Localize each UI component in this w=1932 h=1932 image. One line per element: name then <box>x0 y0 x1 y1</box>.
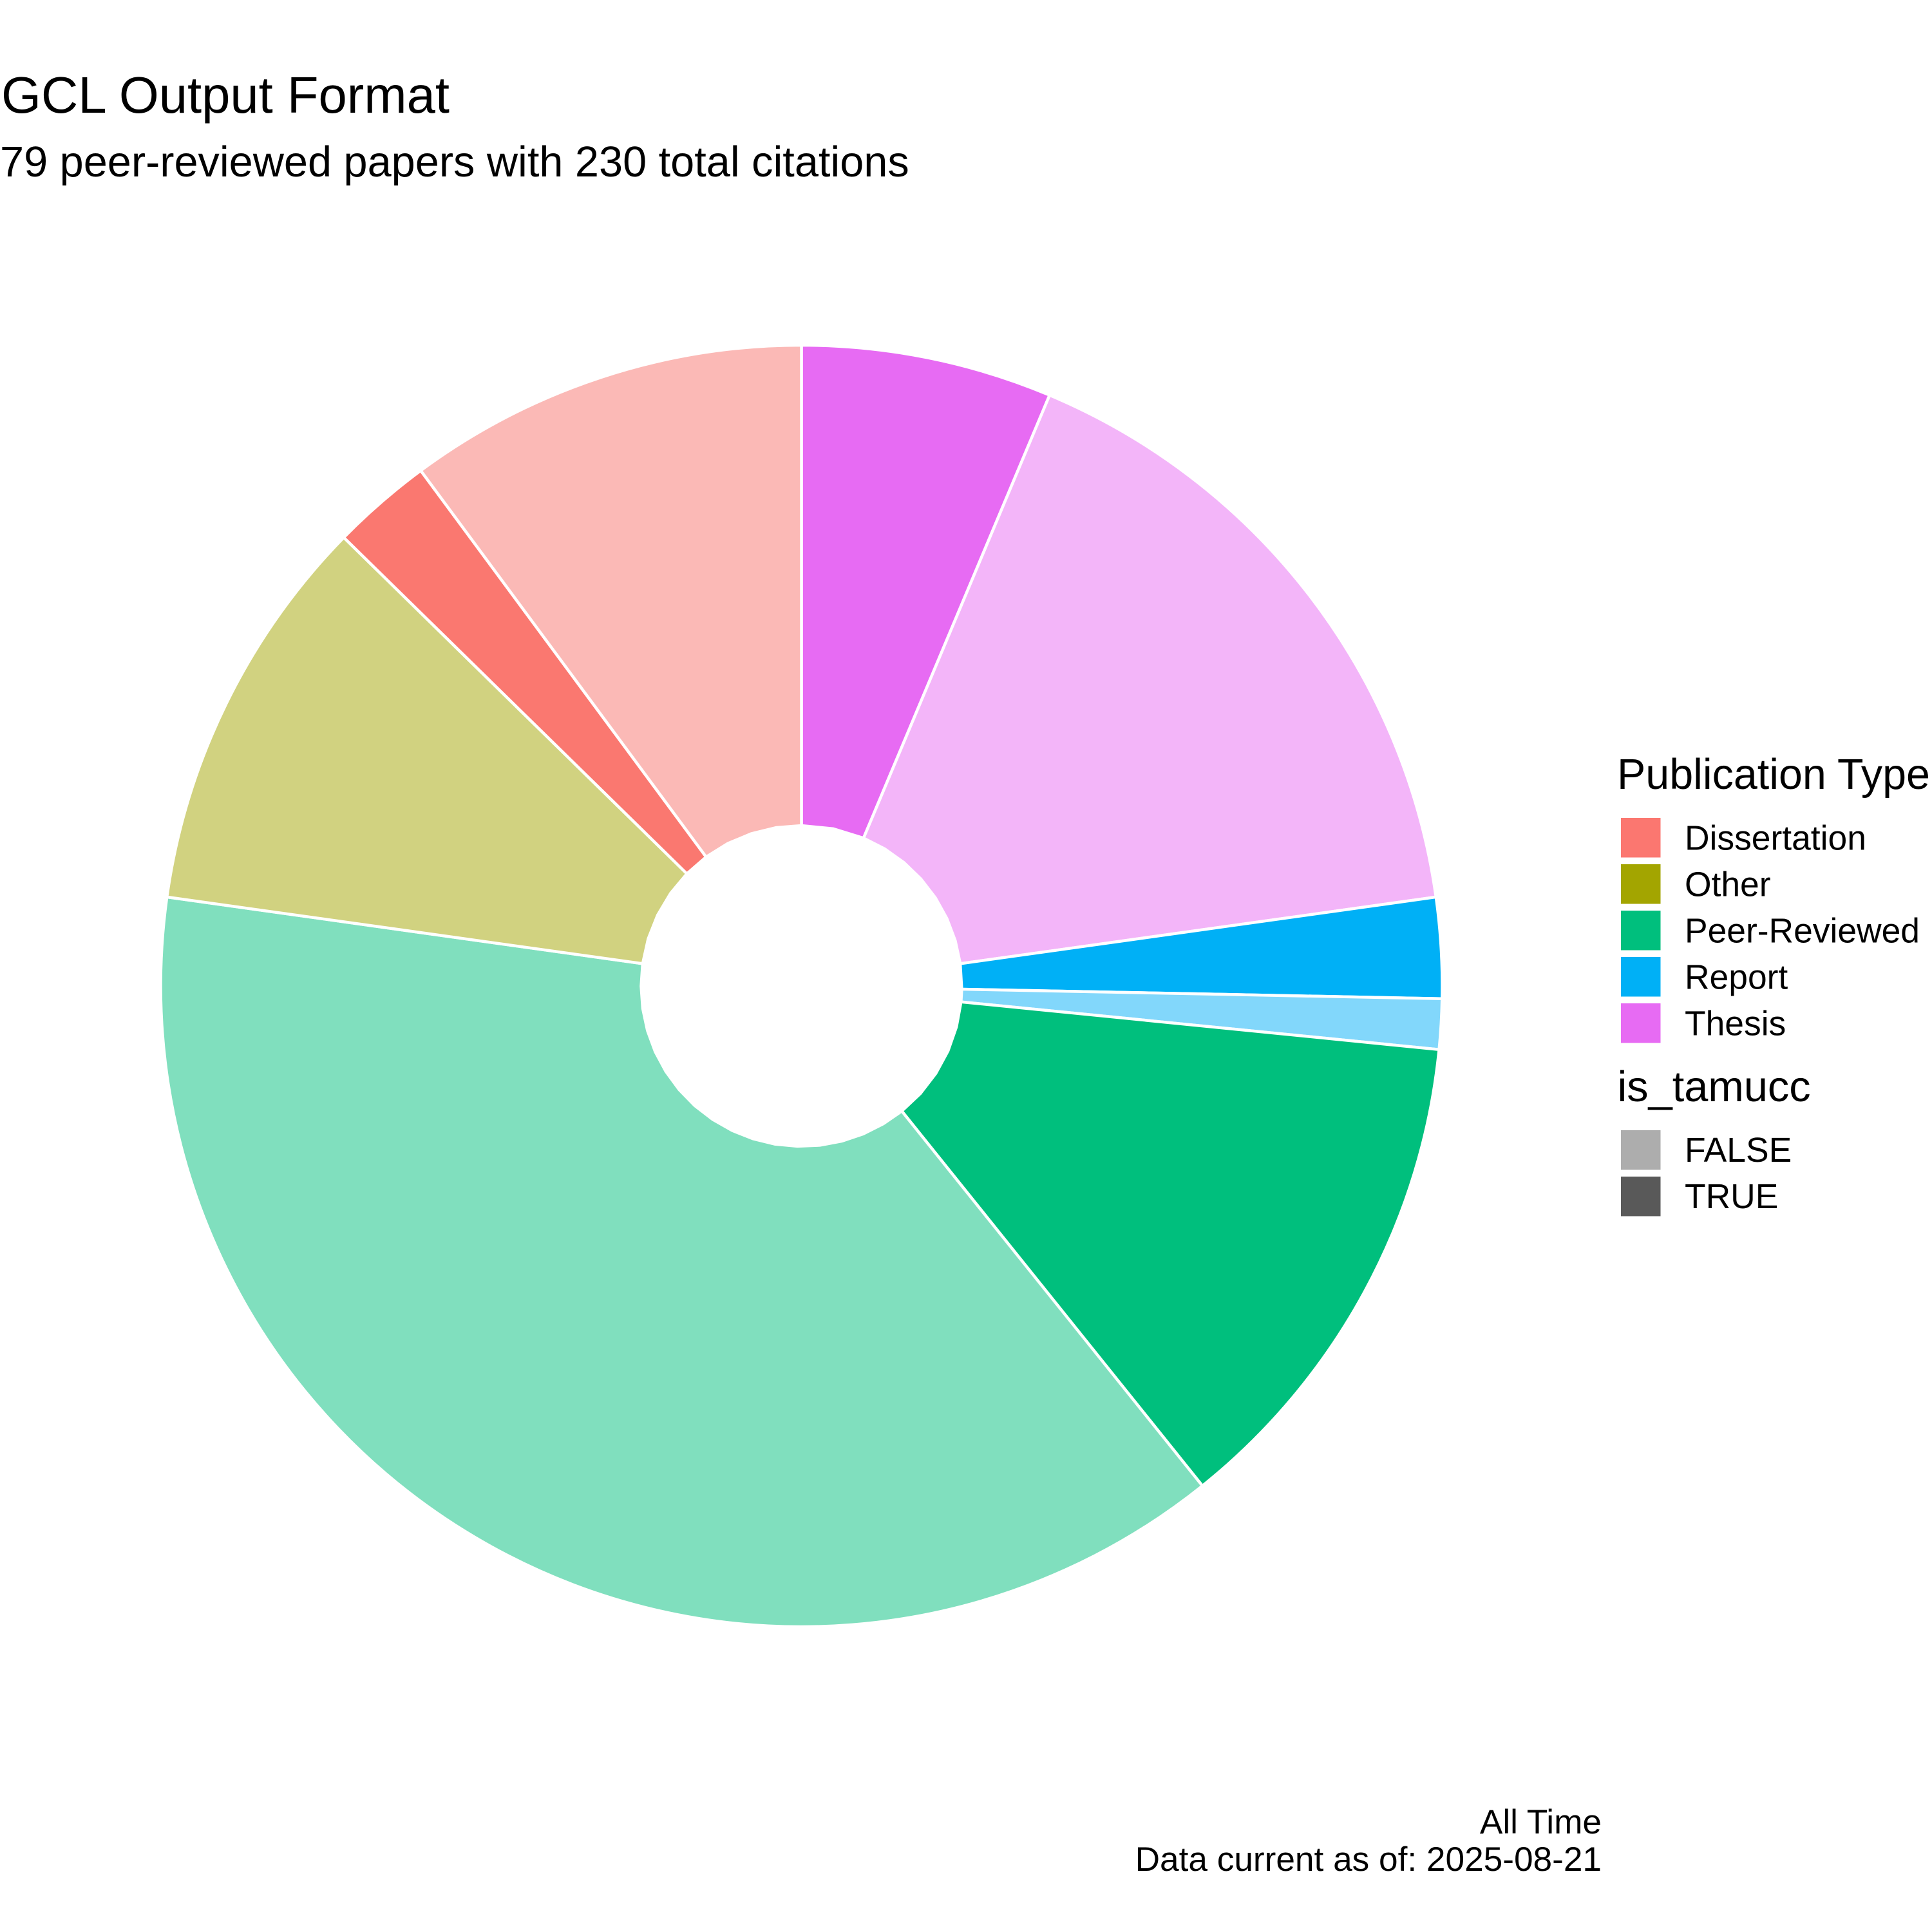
caption: Data current as of: 2025-08-21 <box>1135 1841 1602 1879</box>
slice: Peer-Reviewed FALSE <box>161 897 1202 1627</box>
legend item: Dissertation: Dissertation <box>1685 819 1866 858</box>
legend item: FALSE: FALSE <box>1685 1132 1792 1170</box>
legend title: Publication Type <box>1617 751 1930 799</box>
title: GCL Output Format <box>1 66 450 124</box>
slice: Peer-Reviewed TRUE <box>902 1002 1439 1486</box>
slice: Thesis FALSE <box>864 395 1436 963</box>
legend title: is_tamucc <box>1618 1063 1811 1111</box>
legend item: FALSE <box>1621 1130 1792 1170</box>
legend item: TRUE <box>1621 1177 1778 1216</box>
donut chart <box>161 345 1442 1627</box>
subtitle: 79 peer-reviewed papers with 230 total citations <box>0 138 909 186</box>
caption <box>1135 1803 1602 1879</box>
slice: Other FALSE <box>167 538 687 963</box>
caption: All Time <box>1480 1803 1602 1841</box>
slice: Dissertation FALSE <box>421 345 801 857</box>
legend item: Report <box>1621 957 1788 997</box>
slice: Thesis TRUE <box>801 345 1050 838</box>
legend item: Other: Other <box>1685 866 1771 904</box>
legend item: Report: Report <box>1685 958 1788 997</box>
legend: is_tamucc <box>1618 1063 1811 1216</box>
legend item: Thesis: Thesis <box>1685 1005 1786 1043</box>
legend item: TRUE: TRUE <box>1685 1178 1778 1216</box>
slice: Dissertation TRUE <box>344 471 706 874</box>
legend item: Peer-Reviewed: Peer-Reviewed <box>1685 912 1920 951</box>
slice: Report FALSE <box>961 989 1442 1050</box>
legend item: Other <box>1621 864 1771 904</box>
legend: Publication Type <box>1617 751 1930 1043</box>
legend item: Thesis <box>1621 1003 1786 1043</box>
slice: Report TRUE <box>960 897 1442 999</box>
